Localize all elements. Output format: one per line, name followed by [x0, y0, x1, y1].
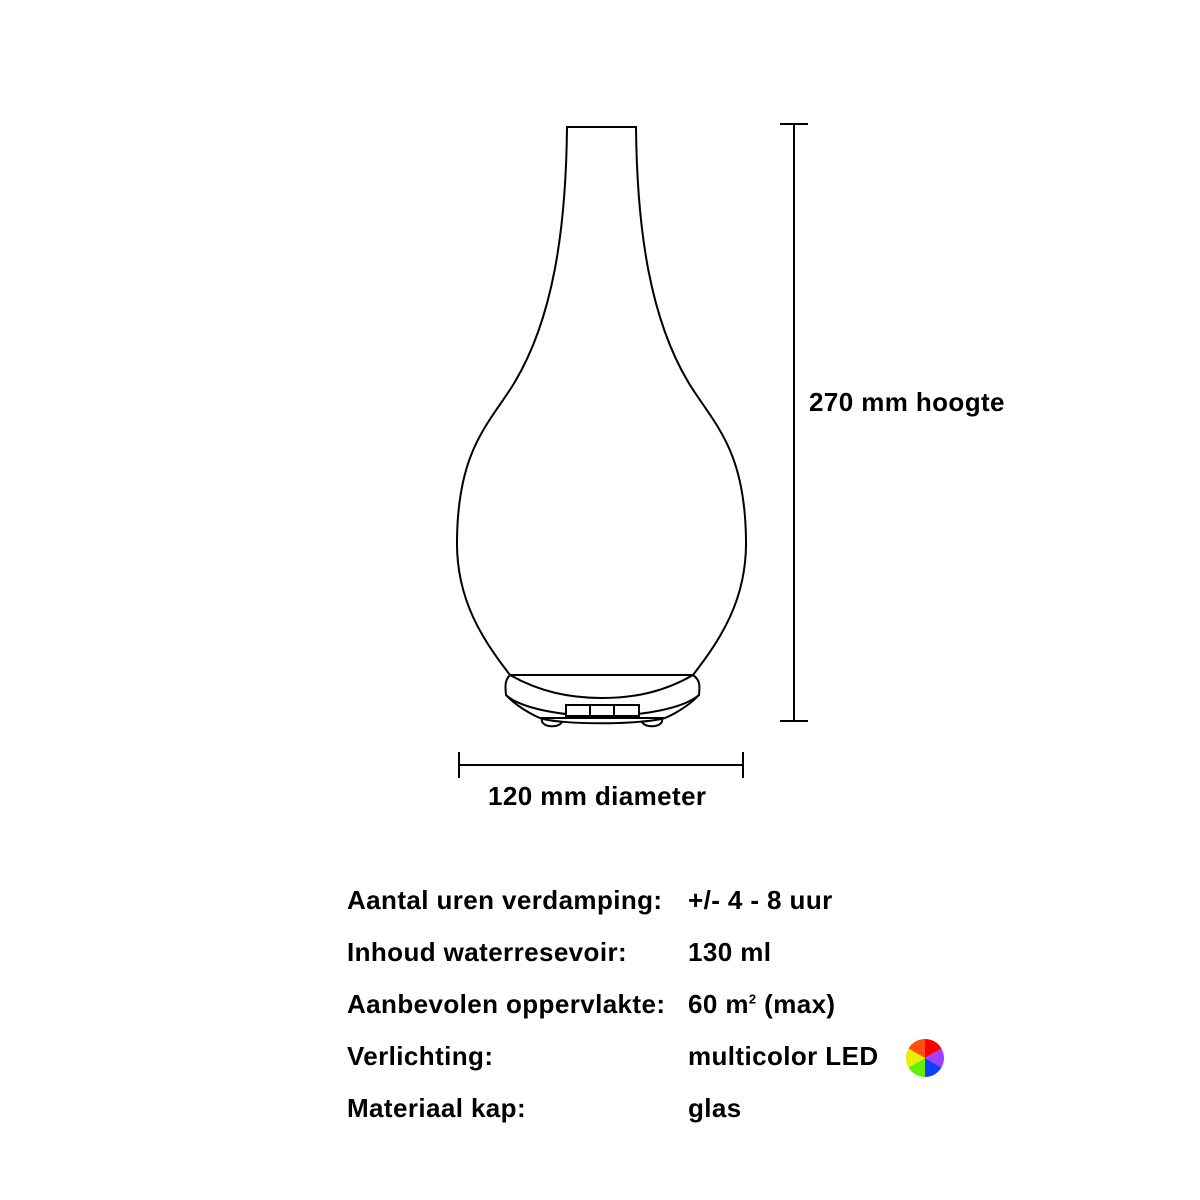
base ring: [505, 675, 699, 723]
row: materiaal: Materiaal kap:: [347, 1093, 526, 1123]
vase glass body: [457, 127, 746, 675]
feet: [542, 719, 662, 726]
row: inhoud: Inhoud waterresevoir:: [347, 937, 627, 967]
spec table: 130 ml: [688, 937, 771, 967]
label: diameter: 120 mm diameter: [488, 781, 706, 811]
row: oppervlakte: Aanbevolen oppervlakte:: [347, 989, 665, 1019]
spec table: [347, 885, 944, 1123]
height dimension line: [780, 124, 808, 721]
row: verlichting: Verlichting:: [347, 1041, 493, 1071]
spec table: 60 m2 (max): [688, 989, 836, 1019]
spec table: multicolor LED: [688, 1041, 878, 1071]
spec table: +/- 4 - 8 uur: [688, 885, 833, 915]
diameter dimension line: [459, 752, 743, 778]
spec table: glas: [688, 1093, 742, 1123]
control buttons: [566, 705, 639, 716]
icon: color wheel: [906, 1039, 944, 1077]
label: height: 270 mm hoogte: [809, 387, 1005, 417]
row: verdamping: Aantal uren verdamping:: [347, 885, 662, 915]
